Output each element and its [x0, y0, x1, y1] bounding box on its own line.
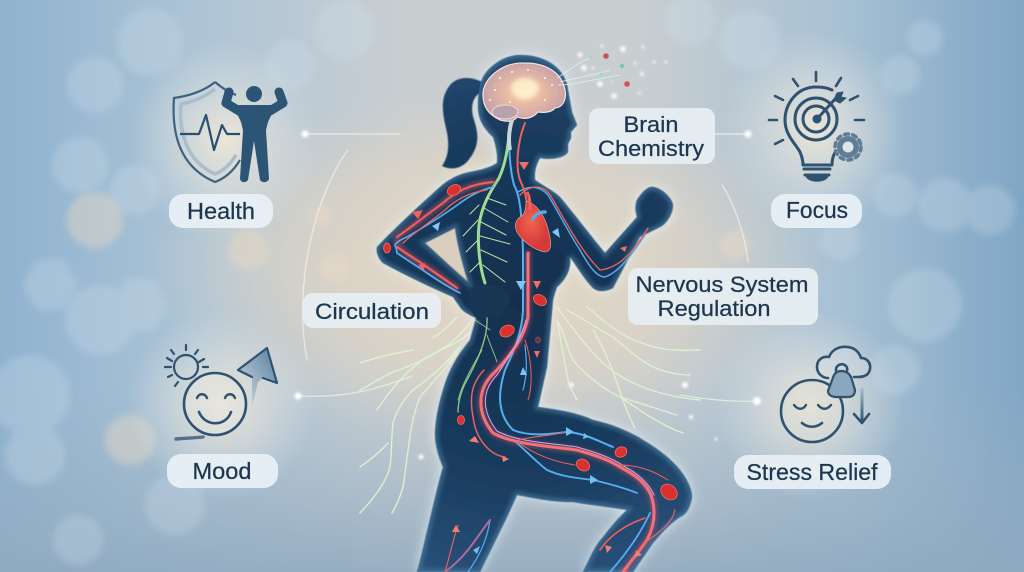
icon: smiley with sun and arrow	[165, 345, 277, 439]
body silhouette	[377, 55, 692, 572]
label: Focus: Focus	[786, 197, 848, 223]
red blood cells	[384, 183, 680, 503]
label: Circulation	[303, 293, 441, 328]
nervous system	[458, 125, 510, 412]
icon: light bulb, target and gear	[769, 72, 864, 181]
label: Brain Chemistry	[589, 108, 715, 164]
label: Stress Relief: Stress Relief	[746, 459, 878, 485]
vessel glow	[396, 182, 654, 572]
flow arrows	[412, 162, 642, 557]
label: Focus	[771, 194, 862, 228]
label: Nervous System Regulation: Regulation	[658, 296, 770, 321]
blood vessels: veins	[395, 123, 650, 572]
neurotransmitter particles	[557, 44, 668, 99]
brain	[483, 63, 565, 150]
ponytail	[442, 78, 482, 168]
figure halo	[377, 55, 692, 572]
heart	[515, 192, 551, 252]
hand	[468, 285, 508, 320]
label: Brain Chemistry: Chemistry	[598, 136, 705, 161]
label: Mood: Mood	[192, 458, 252, 484]
body edge light	[377, 55, 692, 572]
icon: calm face, cloud and weight	[781, 347, 870, 442]
figure: running woman	[377, 55, 692, 572]
label: Mood	[167, 454, 278, 488]
label: Brain Chemistry: Brain	[624, 112, 678, 137]
label: Nervous System Regulation	[628, 268, 818, 325]
gap between arm and torso	[420, 224, 472, 288]
label: Health	[169, 194, 273, 228]
connector lines	[294, 130, 761, 460]
label: Circulation: Circulation	[315, 299, 429, 324]
icon: shield and strong person	[174, 82, 283, 182]
label: Nervous System Regulation: Nervous System	[636, 272, 808, 297]
label: Stress Relief	[734, 455, 891, 489]
nerve fibres fanning out	[360, 307, 700, 513]
label: Health: Health	[187, 198, 255, 224]
blood vessels: arteries	[397, 123, 675, 572]
